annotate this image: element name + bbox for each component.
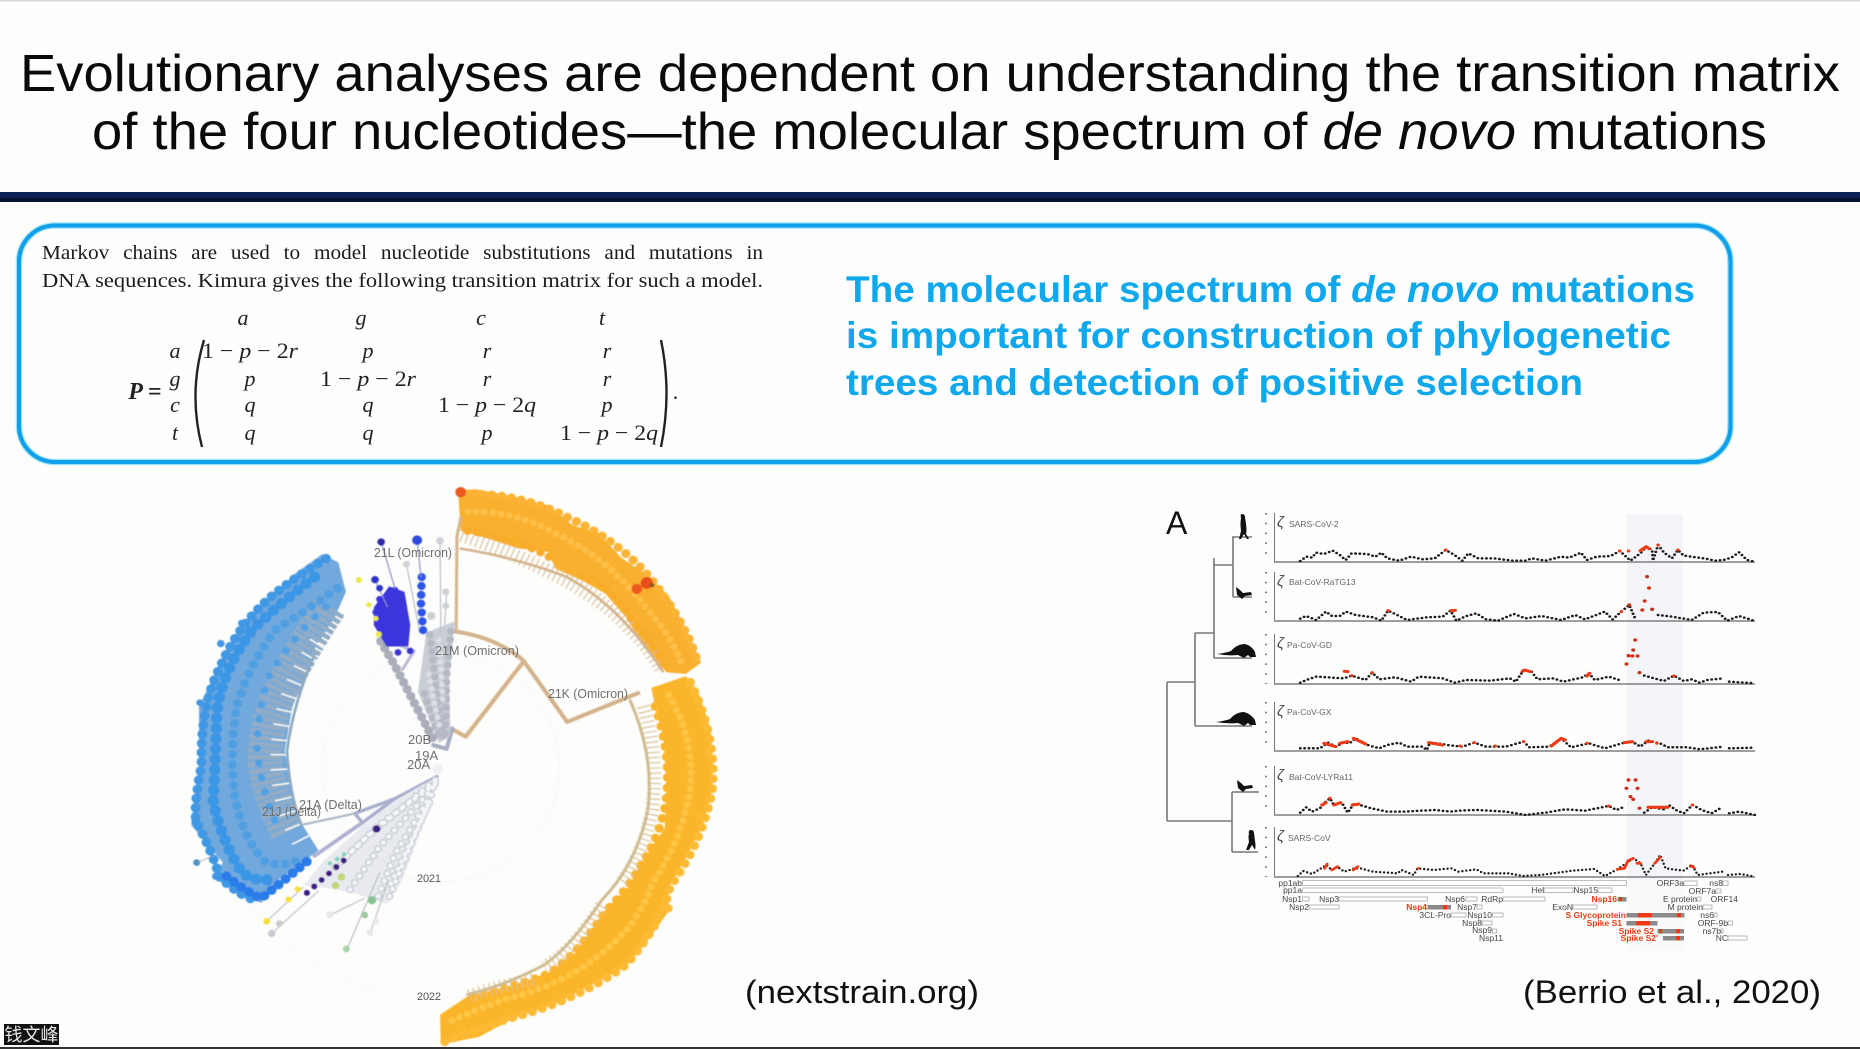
icon: bat LYRa11 xyxy=(1237,780,1253,792)
transition matrix: 1 − p − 2r xyxy=(320,366,416,391)
transition matrix xyxy=(127,305,679,447)
icon: human xyxy=(1239,514,1249,539)
genome map: ns6 xyxy=(1700,910,1714,920)
light early clades xyxy=(304,777,437,904)
tree clade labels: 20A xyxy=(407,757,430,772)
transition matrix: 1 − p − 2r xyxy=(202,338,298,363)
key message: The molecular spectrum of de novo mutations xyxy=(846,269,1695,310)
genome map: Nsp16 xyxy=(1591,894,1617,904)
text block: Markov description xyxy=(42,242,763,292)
orange upper clade xyxy=(458,489,701,674)
transition matrix: r xyxy=(603,338,612,363)
tree clade labels xyxy=(262,545,628,1003)
tree clade labels: 2022 xyxy=(417,991,441,1003)
genome map: ExoN xyxy=(1552,902,1573,912)
key message: trees and detection of positive selection xyxy=(846,362,1583,403)
transition matrix: c xyxy=(476,305,486,330)
transition matrix: r xyxy=(603,366,612,391)
zeta axis glyphs: ζ xyxy=(1277,635,1285,652)
genome map: Hel xyxy=(1531,885,1544,895)
transition matrix: q xyxy=(362,392,374,417)
caption: Berrio et al: (Berrio et al., 2020) xyxy=(1523,974,1821,1010)
genome map: Nsp9 xyxy=(1472,925,1492,935)
radial phylogenetic tree (nextstrain) xyxy=(191,487,713,1044)
genome map: Nsp8 xyxy=(1462,918,1482,928)
icon: bat xyxy=(1236,587,1252,599)
genome map: 3CL-Pro xyxy=(1419,910,1451,920)
panel: Markov matrix and key message xyxy=(19,226,1730,462)
transition matrix: p xyxy=(360,338,374,363)
zeta axis glyphs: ζ xyxy=(1277,828,1285,845)
transition matrix: g xyxy=(170,366,180,391)
zeta axis glyphs xyxy=(1277,514,1285,845)
transition matrix: q xyxy=(244,392,256,417)
tree clade labels: 21M (Omicron) xyxy=(435,643,519,658)
genome map: Nsp10 xyxy=(1467,910,1492,920)
genome map: Spike S2 xyxy=(1619,926,1654,936)
genome map: ORF7a xyxy=(1689,886,1716,896)
header rule xyxy=(0,192,1860,202)
grey clades xyxy=(418,621,455,743)
genome map: Nsp6 xyxy=(1445,894,1465,904)
y axes and baselines xyxy=(1266,513,1755,877)
genome map: Nsp4 xyxy=(1406,902,1427,912)
icon: human SARS-CoV xyxy=(1246,830,1258,850)
title: Evolutionary analyses are dependent on understanding the transition matrix xyxy=(20,45,1840,103)
tree clade labels: 19A xyxy=(415,748,438,763)
cladogram xyxy=(1167,537,1259,852)
transition matrix: 1 − p − 2q xyxy=(560,420,658,445)
species labels: SARS-CoV xyxy=(1288,833,1331,843)
genome map: ns7b xyxy=(1703,926,1721,936)
transition matrix: q xyxy=(362,420,374,445)
caption: nextstrain: (nextstrain.org) xyxy=(745,974,979,1010)
tree clade labels: 21K (Omicron) xyxy=(548,686,628,701)
genome map: ORF14 xyxy=(1711,894,1738,904)
genome map: ns8 xyxy=(1709,878,1723,888)
indigo clade xyxy=(374,586,410,647)
blue clade xyxy=(191,554,346,903)
genome map: pp1a xyxy=(1283,885,1302,895)
species labels: Pa-CoV-GX xyxy=(1287,707,1332,717)
transition matrix: a xyxy=(170,338,180,363)
tree clade labels: 21J (Delta) xyxy=(262,804,321,819)
genome map: Spike S2' xyxy=(1621,933,1658,943)
transition matrix: c xyxy=(170,392,180,417)
tree clade labels: 20B xyxy=(408,732,431,747)
transition matrix: r xyxy=(483,366,492,391)
transition matrix: g xyxy=(356,305,366,330)
key message xyxy=(846,269,1695,403)
genome map: S Glycoprotein xyxy=(1566,910,1626,920)
transition matrix: p xyxy=(242,366,256,391)
zeta axis glyphs: ζ xyxy=(1277,514,1285,531)
transition matrix: . xyxy=(673,379,679,404)
transition matrix: t xyxy=(599,305,606,330)
genome map: RdRp xyxy=(1481,894,1503,904)
species labels: SARS-CoV-2 xyxy=(1289,519,1339,529)
panel label A: A xyxy=(1166,505,1188,541)
species labels: Bat-CoV-LYRa11 xyxy=(1289,772,1353,782)
branches xyxy=(456,518,461,629)
title xyxy=(20,45,1840,161)
transition matrix: 1 − p − 2q xyxy=(438,392,536,417)
transition matrix: P = xyxy=(127,379,162,405)
species labels xyxy=(1287,519,1356,843)
transition matrix: q xyxy=(244,420,256,445)
genome map: Nsp2 xyxy=(1289,902,1309,912)
key message: is important for construction of phylogenetic xyxy=(846,315,1671,356)
genome map: ORF-9b xyxy=(1698,918,1728,928)
genome map: Nsp3 xyxy=(1319,894,1339,904)
transition matrix: r xyxy=(483,338,492,363)
transition matrix: t xyxy=(172,420,179,445)
zeta axis glyphs: ζ xyxy=(1277,573,1285,590)
genome map: M protein xyxy=(1668,902,1703,912)
transition matrix: p xyxy=(480,420,492,445)
icon: pangolin xyxy=(1217,644,1256,658)
species labels: Bat-CoV-RaTG13 xyxy=(1289,577,1356,587)
genome map: pp1ab xyxy=(1278,878,1302,888)
text block: Markov description: Markov chains are used to model nucleotide substitutions and mutations in xyxy=(42,242,763,264)
tree clade labels: 21A (Delta) xyxy=(299,797,362,812)
spike peaks xyxy=(1626,577,1652,808)
tree clade labels: 21L (Omicron) xyxy=(374,545,452,560)
genome map: ORF3a xyxy=(1657,878,1684,888)
genome map: Nsp1 xyxy=(1282,894,1302,904)
transition matrix: p xyxy=(600,392,612,417)
orange lower clade xyxy=(440,676,713,1044)
icon: pangolin GX xyxy=(1216,712,1256,726)
red tips xyxy=(455,487,466,497)
genome map: Spike S1 xyxy=(1587,918,1622,928)
transition matrix: a xyxy=(238,305,248,330)
genome map: Nsp7 xyxy=(1457,902,1477,912)
zeta axis glyphs: ζ xyxy=(1277,767,1285,784)
genome map: NC xyxy=(1716,933,1728,943)
tree clade labels: 2021 xyxy=(417,873,441,885)
genome map xyxy=(1278,878,1747,943)
title: of the four nucleotides—the molecular spectrum of de novo mutations xyxy=(92,103,1767,161)
selection traces xyxy=(1300,545,1755,815)
genome map: E protein xyxy=(1663,894,1697,904)
text block: Markov description: DNA sequences. Kimura gives the following transition matrix for such a model. xyxy=(42,270,763,292)
watermark: 钱文峰 xyxy=(4,1025,58,1045)
genome map: Nsp11 xyxy=(1479,933,1503,943)
zeta axis glyphs: ζ xyxy=(1277,703,1285,720)
highlighted spike band xyxy=(1627,514,1683,880)
positive selection chart with phylogeny xyxy=(1167,513,1755,950)
genome map: Nsp15 xyxy=(1573,885,1598,895)
species labels: Pa-CoV-GD xyxy=(1287,640,1332,650)
